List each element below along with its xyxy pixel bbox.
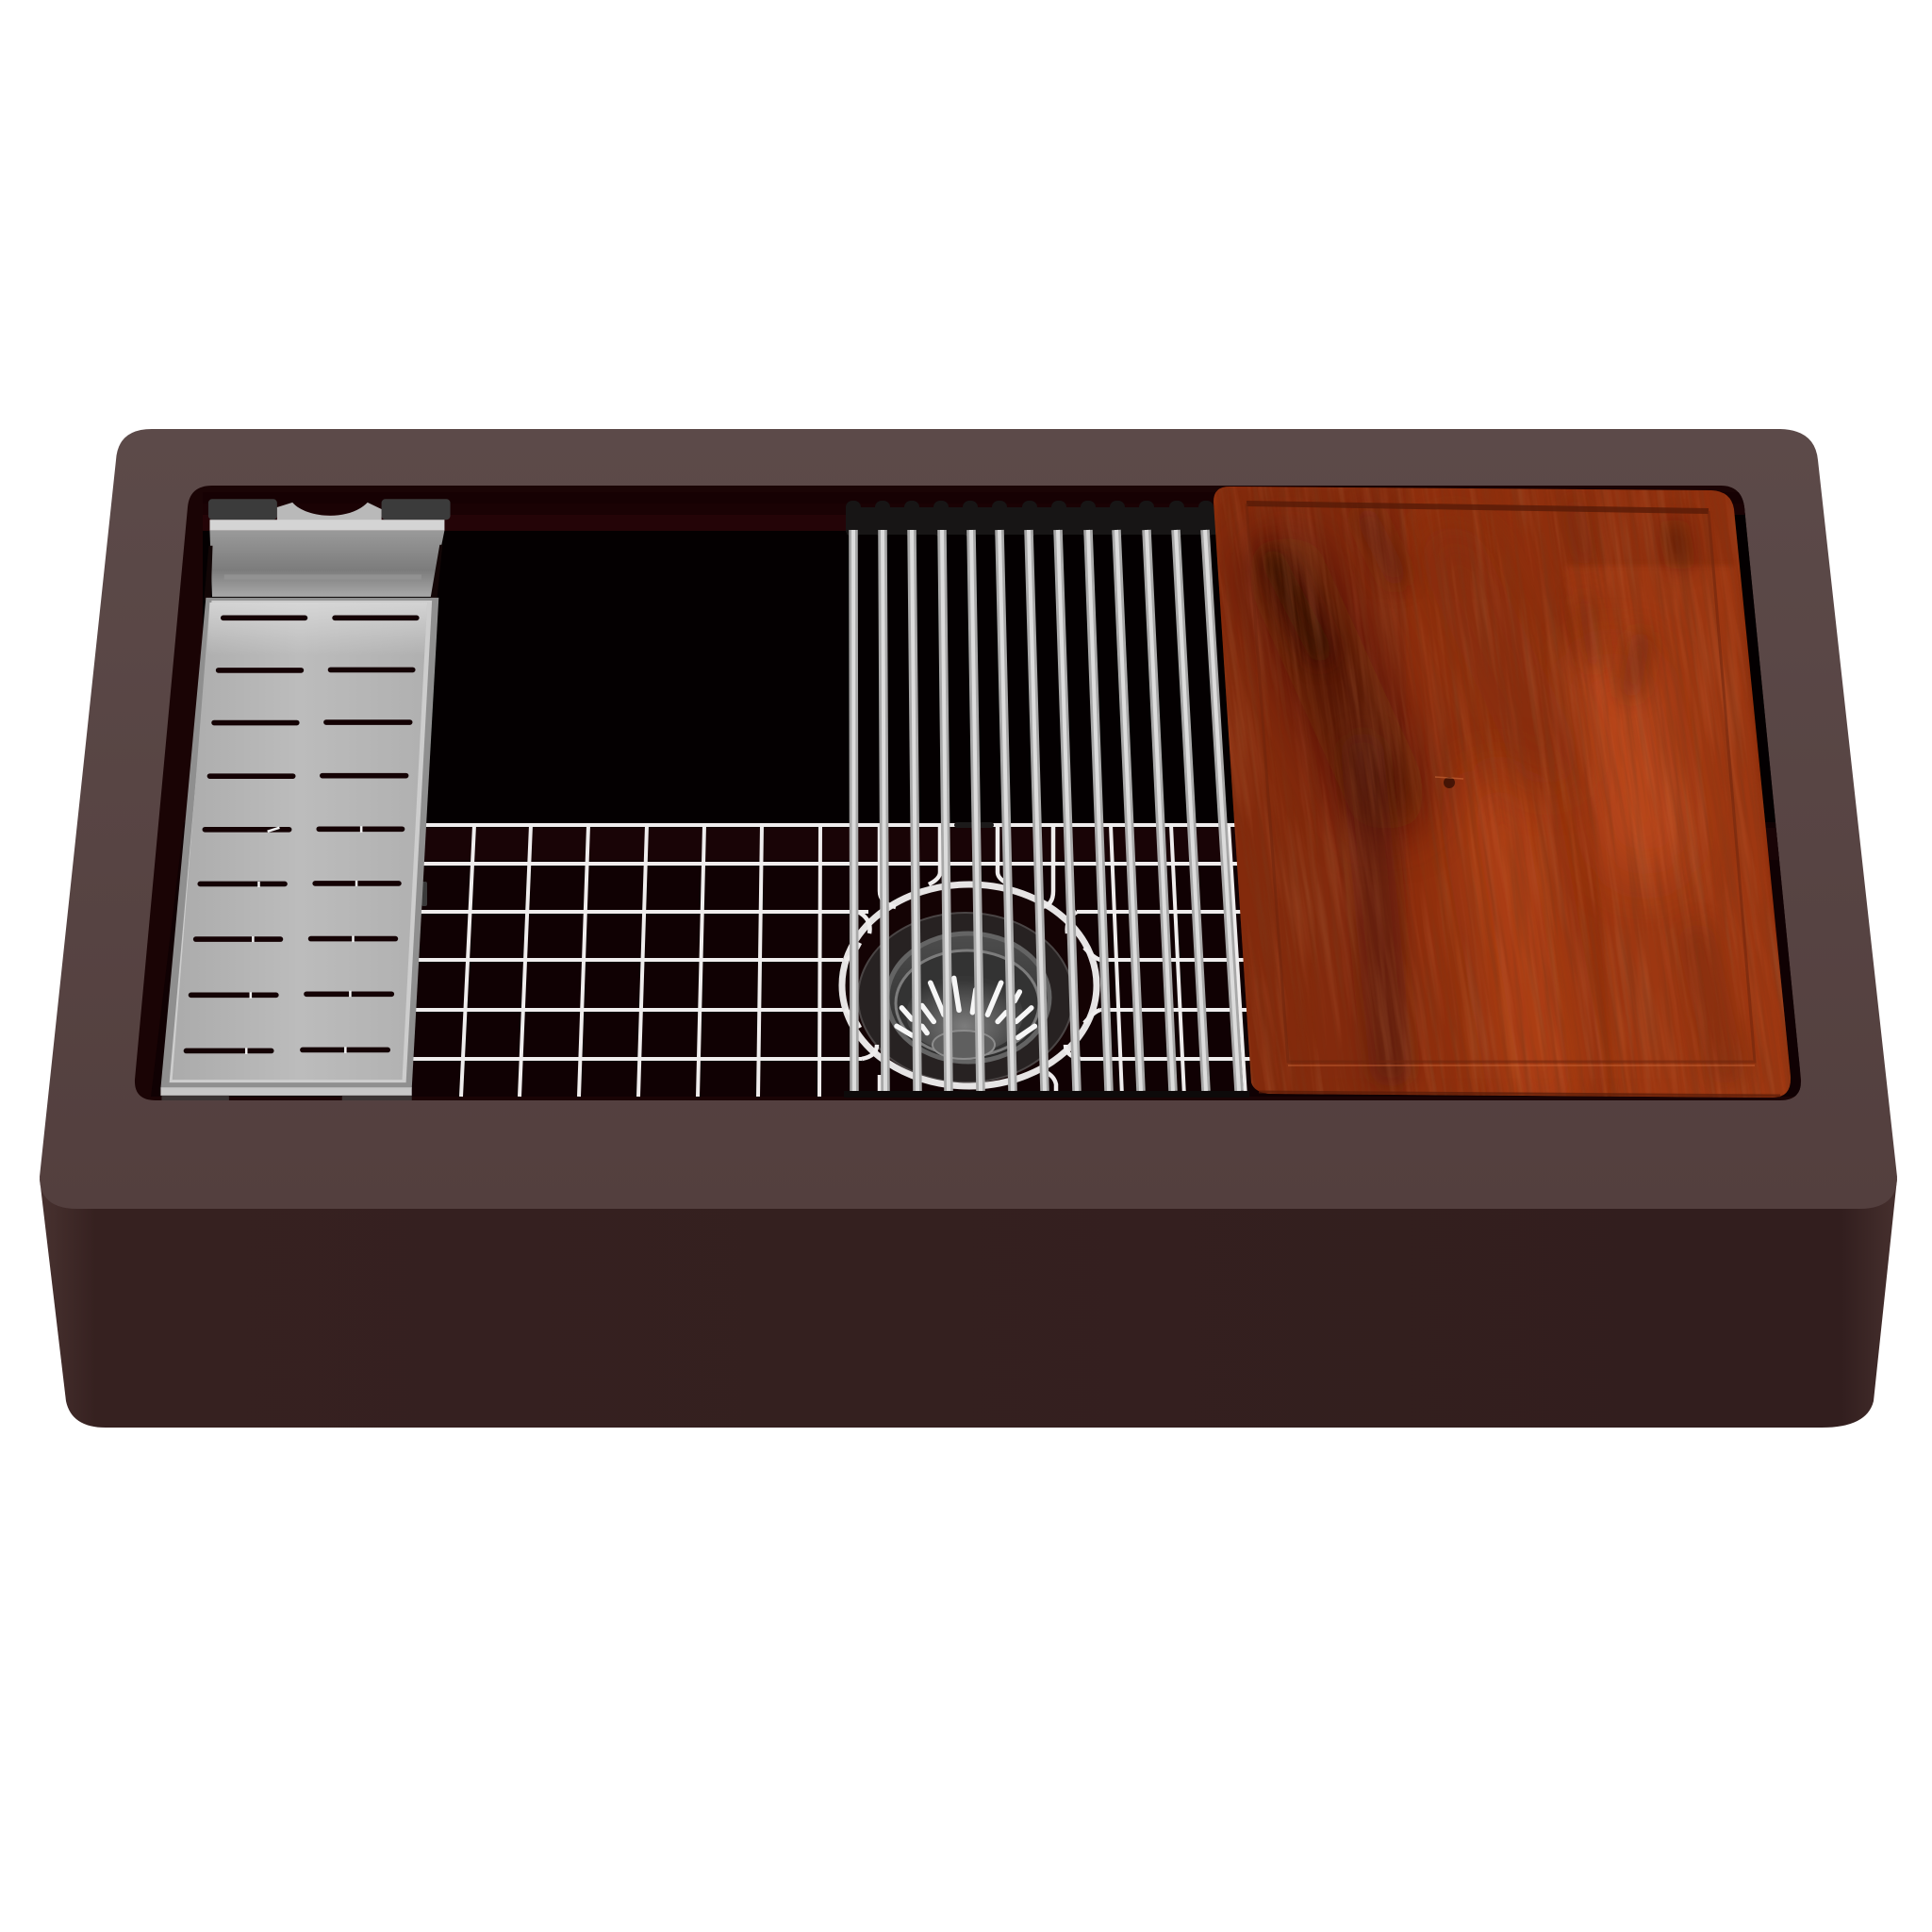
right plank tone: [1565, 566, 1792, 1098]
wood grain: [1249, 488, 1790, 1098]
illustration: workstation farmhouse sink: [40, 429, 1897, 1428]
ring connector wires: [880, 825, 1053, 907]
tray handle plate: [277, 503, 382, 520]
slot reflections: [246, 826, 361, 1054]
tray back wall: [209, 530, 444, 597]
roll-up drying rack: [844, 501, 1249, 1098]
colander tray: [160, 499, 451, 1100]
drain assembly: [843, 885, 1096, 1085]
sink front apron: [40, 1179, 1897, 1428]
wood knot: [1435, 777, 1463, 788]
rack rods: [853, 530, 1239, 1091]
tray highlight: [206, 603, 427, 655]
rod highlights: [853, 530, 1239, 1091]
tray slots: [186, 618, 417, 1050]
drain flange: [858, 913, 1073, 1082]
strainer: [906, 976, 1023, 1053]
drain basket rim: [887, 933, 1049, 1062]
tray floor: [173, 603, 427, 1080]
bottom grid rack: [405, 825, 1258, 1097]
juice groove: [1247, 504, 1755, 1065]
wood tone patches: [1273, 509, 1726, 1084]
grid clip bar: [954, 822, 994, 828]
tray side shadows: [204, 545, 442, 601]
tray top bar: [209, 520, 444, 530]
sink top deck: [40, 429, 1897, 1209]
grid side clip: [421, 882, 427, 906]
tray front caps: [161, 1096, 412, 1100]
strainer slots: [897, 978, 1034, 1037]
basin floor: [151, 822, 1801, 1097]
grid horizontal wires: [405, 825, 1258, 1059]
drain ring: [842, 884, 1097, 1086]
tray handle caps: [208, 499, 451, 520]
wood highlights: [1226, 487, 1785, 1098]
wooden cutting board: [1214, 487, 1792, 1098]
rack front cap bar: [844, 1091, 1249, 1098]
left plank shade: [1216, 487, 1406, 1098]
rack back cap bar: [846, 501, 1238, 537]
basin opening: [135, 486, 1801, 1100]
accessory ledge: [203, 492, 1782, 531]
board front edge: [1259, 1092, 1780, 1096]
drain recess: [843, 885, 1096, 1085]
tray front bar: [160, 1087, 412, 1096]
tray rim: [160, 598, 438, 1088]
basin back wall: [203, 492, 1782, 822]
grid vertical wires: [461, 825, 1246, 1097]
